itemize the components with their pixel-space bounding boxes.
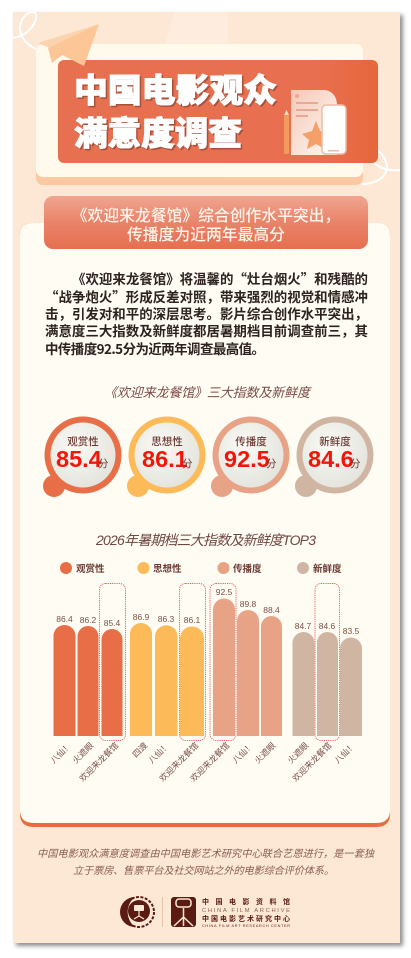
icon: survey document with phone and star — [284, 90, 346, 155]
logo: round emblem — [120, 897, 154, 927]
legend: 新鲜度 — [313, 563, 342, 575]
legend: 思想性 — [153, 563, 182, 575]
score badge: 传播度: 92.5 — [224, 446, 270, 472]
logo text — [202, 897, 290, 928]
section heading: four scores: 《欢迎来龙餐馆》三大指数及新鲜度 — [104, 382, 312, 401]
score badge: 传播度 — [211, 416, 290, 497]
category labels: 八仙！ — [48, 740, 73, 765]
value labels: 86.2 — [80, 615, 97, 625]
category labels: 八仙！ — [332, 740, 357, 765]
subtitle banner: 《欢迎来龙餐馆》综合创作水平突出， — [72, 203, 340, 226]
logo text: 中国电影资料馆 — [202, 897, 290, 906]
value labels: 89.8 — [240, 599, 257, 609]
header decoration: swirls — [13, 12, 400, 184]
score badge: 观赏性 — [43, 416, 122, 497]
value labels: 92.5 — [216, 587, 233, 597]
subtitle banner — [44, 196, 368, 249]
category labels: 火遮眼 — [70, 740, 96, 765]
score badge: 观赏性: 观赏性 — [67, 435, 99, 448]
intro paragraph: 中传播度92.5分为近两年调查最高值。 — [45, 338, 265, 358]
value labels: 88.4 — [263, 605, 280, 615]
bars: 思想性 — [130, 623, 204, 736]
title: 满意度调查 — [74, 115, 242, 152]
intro paragraph: 满意度三大指数及新鲜度都居暑期档目前调查前三，其 — [45, 320, 368, 340]
value labels: 86.3 — [158, 614, 175, 624]
category labels: 欢迎来龙餐馆 — [157, 740, 200, 783]
value labels: 83.5 — [343, 626, 360, 636]
score badge: 新鲜度 — [295, 416, 374, 497]
category labels: 欢迎来龙餐馆 — [188, 740, 231, 783]
score badge: 思想性: 思想性 — [151, 435, 183, 448]
legend: 传播度 — [233, 563, 262, 575]
category labels: 八仙！ — [230, 740, 255, 765]
category labels: 八仙！ — [146, 740, 171, 765]
score badge: 传播度: 分 — [266, 458, 277, 470]
logo area — [120, 897, 290, 928]
intro paragraph: 《欢迎来龙餐馆》将温馨的“灶台烟火”和残酷的 — [72, 268, 368, 288]
score badge: 思想性 — [127, 416, 206, 497]
logo: film camera square — [171, 897, 196, 927]
category labels: 火遮眼 — [252, 740, 278, 765]
section heading: chart: 2026年暑期档三大指数及新鲜度TOP3 — [95, 532, 316, 548]
score badge: 新鲜度: 84.6 — [308, 446, 354, 472]
category labels: 欢迎来龙餐馆 — [77, 740, 120, 783]
score badge: 观赏性: 分 — [98, 458, 109, 470]
highlight frames — [100, 584, 340, 740]
category labels — [48, 740, 357, 783]
footnote — [37, 848, 375, 877]
score badge: 传播度: 传播度 — [235, 435, 267, 448]
footnote: 中国电影观众满意度调查由中国电影艺术研究中心联合艺恩进行，是一套独 — [37, 848, 375, 860]
subtitle banner: 传播度为近两年最高分 — [127, 222, 285, 245]
value labels — [56, 587, 360, 636]
intro paragraph: “战争炮火”形成反差对照，带来强烈的视觉和情感冲 — [45, 286, 368, 306]
title: 中国电影观众 — [74, 72, 277, 109]
title: 中国电影观众 — [76, 74, 278, 110]
logo text: CHINA FILM ART RESEARCH CENTER — [202, 924, 290, 928]
score badge: 新鲜度: 新鲜度 — [319, 435, 351, 448]
value labels: 84.6 — [319, 621, 336, 631]
category labels: 四渡 — [130, 740, 150, 759]
score badge: 观赏性: 85.4 — [56, 446, 102, 472]
value labels: 86.1 — [184, 615, 201, 625]
bars: 传播度 — [213, 598, 282, 736]
score badge: 思想性: 86.1 — [142, 446, 188, 472]
title: 满意度调查 — [76, 116, 244, 154]
score badge: 思想性: 分 — [182, 458, 193, 470]
value labels: 84.7 — [295, 621, 312, 631]
bars: 观赏性 — [54, 625, 122, 736]
category labels: 欢迎来龙餐馆 — [290, 740, 333, 783]
logo text: CHINA FILM ARCHIVE — [202, 908, 290, 914]
title — [74, 72, 278, 154]
main content panel — [20, 223, 390, 827]
value labels: 86.9 — [133, 612, 150, 622]
intro paragraph: 击，引发对和平的深层思考。影片综合创作水平突出， — [45, 303, 368, 323]
value labels: 86.4 — [56, 614, 73, 624]
title banner — [58, 60, 378, 163]
category labels: 火遮眼 — [285, 740, 311, 765]
value labels: 85.4 — [104, 618, 121, 628]
legend — [60, 562, 342, 575]
icon: paper plane — [38, 24, 99, 66]
bar chart — [48, 584, 362, 783]
bars: 新鲜度 — [292, 632, 362, 736]
logo text: 中国电影艺术研究中心 — [202, 914, 290, 923]
score badge: 新鲜度: 分 — [350, 458, 361, 470]
intro paragraph — [45, 268, 368, 358]
footnote: 立于票房、售票平台及社交网站之外的电影综合评价体系。 — [73, 865, 334, 877]
legend: 观赏性 — [76, 563, 105, 575]
header card — [36, 44, 363, 185]
